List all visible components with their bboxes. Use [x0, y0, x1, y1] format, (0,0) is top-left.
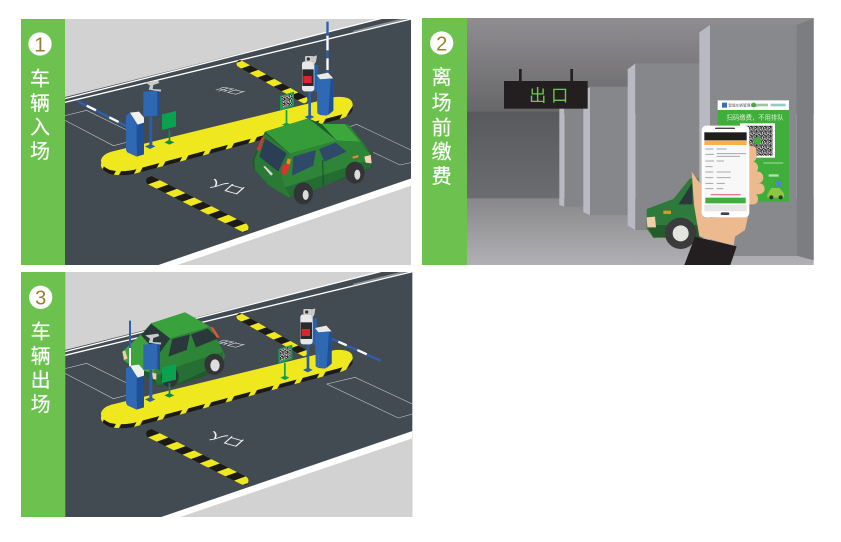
road marking: entrance: 入口: [204, 177, 249, 196]
step number badge: 2: [436, 33, 447, 55]
garage floor: [467, 198, 814, 265]
road marking: exit: 出口: [212, 86, 248, 95]
safety island: [101, 350, 353, 428]
road scene: [65, 16, 417, 265]
step number badge: [29, 286, 52, 310]
step title: [30, 68, 50, 163]
hanging exit sign: 出口: [529, 86, 573, 106]
step number badge: 3: [35, 288, 46, 310]
hand holding phone: [692, 146, 765, 246]
step title: 场: [30, 140, 50, 163]
car leaving: [647, 178, 703, 249]
step number badge: 1: [34, 33, 46, 56]
car entering: [252, 118, 372, 204]
step title: 入: [30, 117, 50, 139]
speed bumps: [151, 64, 304, 228]
parking bay outlines: [65, 363, 412, 418]
road marking: exit: 出口: [212, 339, 248, 348]
panel 2: pay before leaving: [422, 18, 814, 265]
left equipment: [126, 81, 176, 157]
right equipment: [278, 308, 332, 380]
speed bumps: [151, 317, 304, 481]
payment poster: [718, 100, 789, 202]
step title: 前: [432, 116, 452, 139]
back wall: [467, 112, 564, 199]
step title: 费: [432, 165, 452, 188]
phone: [702, 126, 749, 217]
step sidebar: [21, 19, 65, 265]
road scene: [65, 269, 417, 518]
right equipment: [280, 55, 333, 127]
left barrier arm: [77, 101, 127, 127]
pillars: [559, 18, 814, 260]
safety island: [101, 97, 353, 175]
right barrier arm: [332, 339, 381, 361]
step title: [432, 66, 452, 188]
payment poster: 扫码缴费，不用排队: [727, 113, 784, 122]
step title: 车: [31, 321, 51, 344]
garage ceiling: [467, 18, 814, 115]
step title: 车: [30, 68, 50, 91]
step title: 缴: [432, 140, 452, 163]
step title: 场: [432, 92, 452, 115]
step sidebar: [422, 18, 467, 265]
left equipment: [126, 321, 176, 410]
step title: 场: [31, 393, 51, 416]
step title: 离: [432, 66, 452, 89]
step sidebar: [21, 272, 65, 517]
panel 3: vehicle leaving: [21, 269, 417, 518]
step number badge: [28, 32, 52, 56]
sleeve: [684, 237, 737, 265]
step title: 出: [31, 369, 51, 392]
vertical barrier arm: [326, 22, 329, 75]
step title: 辆: [31, 345, 51, 368]
parking bay outlines: [65, 110, 411, 165]
step number badge: [430, 31, 453, 55]
hanging exit sign: [504, 69, 588, 109]
panel 1: vehicle entering: [21, 16, 417, 265]
payment poster: 智能车辆管理系统: [728, 103, 758, 108]
step title: [31, 321, 51, 416]
car leaving: [122, 312, 225, 387]
road marking: entrance: 入口: [204, 429, 248, 448]
step title: 辆: [30, 92, 50, 115]
